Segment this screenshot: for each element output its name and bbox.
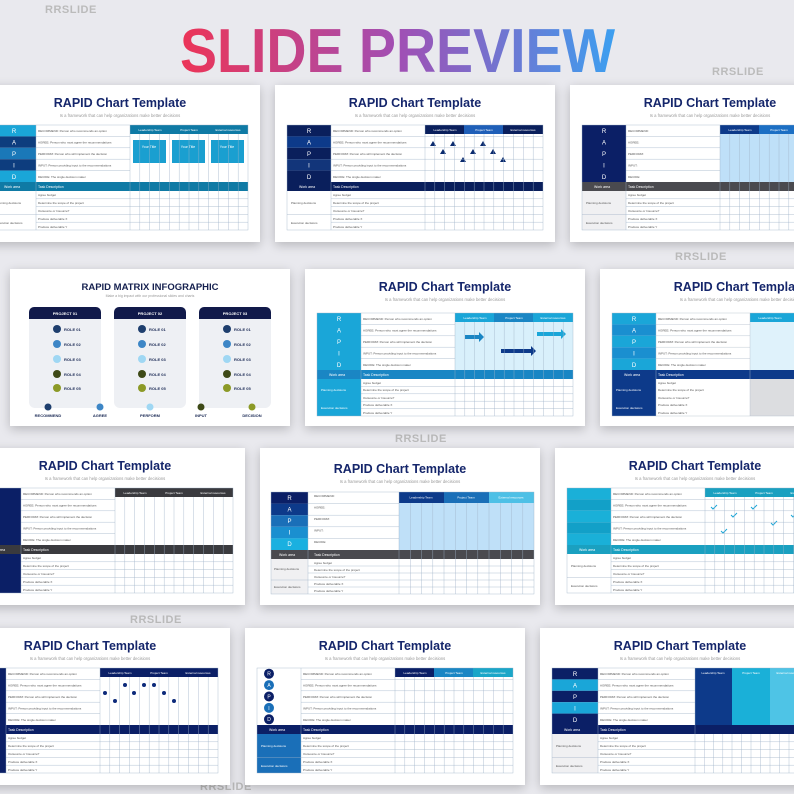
- slide: row4 col2: Outsource or Insource?: [303, 752, 335, 756]
- slide: row1 col3: [570, 85, 794, 242]
- slide: row1 col3: Agree budget: [628, 193, 646, 197]
- slide: row4 col2: P: [267, 694, 271, 700]
- slide: row3 col2: A: [287, 508, 292, 514]
- slide: row3 col1: RECOMMEND: Person who recommends an option: [23, 492, 92, 496]
- slide: row3 col3: [555, 448, 794, 605]
- slide: row2 col2: Determine the scope of the project: [363, 388, 409, 392]
- slide: rapid matrix infographic: ROLE 05: [64, 386, 81, 391]
- slide: row3 col3: Planning decisions: [571, 564, 597, 568]
- slide: row1 col2: DECIDE: The single decision maker: [333, 175, 381, 179]
- slide: row3 col2: Outsource or Insource?: [314, 575, 346, 579]
- slide: row4 col2: R: [267, 672, 271, 678]
- slide: row3 col3: Task Description: [613, 548, 639, 552]
- slide: row3 col3: Is a framework that can help organizations make better decisions: [635, 476, 755, 481]
- slide: row2 col3: Produce deliverable X: [658, 403, 687, 407]
- slide: row1 col2: RAPID Chart Template: [349, 96, 481, 110]
- slide: row4 col1: Outsource or Insource?: [8, 752, 40, 756]
- slide: row2 col2: D: [337, 363, 342, 369]
- slide: row4 col3: Work area: [564, 728, 580, 732]
- slide: row2 col3: Outsource or Insource?: [658, 396, 690, 400]
- watermark: RRSLIDE: [200, 781, 252, 793]
- slide: row4 col3: Task Description: [600, 728, 626, 732]
- slide: rapid matrix infographic: INPUT: [195, 413, 208, 418]
- slide: row4 col2: Determine the scope of the project: [303, 744, 349, 748]
- slide: row1 col1: PERFORM: Person who will implement the decision: [38, 152, 107, 156]
- slide: row4 col2: External resources: [480, 671, 506, 675]
- slide: row2 col2: [305, 269, 585, 426]
- slide: row4 col3: A: [573, 684, 577, 690]
- slide: row3 col2: RECOMMEND:: [314, 494, 335, 498]
- slide: row4 col3: Outsource or Insource?: [600, 752, 632, 756]
- slide: row4 col2: Produce deliverable X: [303, 760, 332, 764]
- slide: rapid matrix infographic: PROJECT 01: [53, 311, 78, 316]
- slide: row1 col1: A: [12, 140, 16, 146]
- slide: row2 col2: INPUT: Person providing input to the recommendations: [363, 352, 437, 356]
- slide: row2 col2: RAPID Chart Template: [379, 280, 511, 294]
- slide: row3 col1: AGREE: Person who must agree the recommendations: [23, 504, 97, 508]
- slide: row4 col2: DECIDE: The single decision maker: [303, 718, 351, 722]
- slide: row3 col1: Determine the scope of the project: [23, 564, 69, 568]
- slide: row1 col2: Project Team: [475, 128, 493, 132]
- slide: rapid matrix infographic: Make a big impact with our professional slides and charts: [106, 294, 195, 298]
- slide: row2 col2: Task Description: [363, 373, 389, 377]
- slide: row1 col2: External resources: [510, 128, 536, 132]
- slide: row4 col3: Leadership Team: [702, 671, 725, 675]
- slide: row2 col2: Produce deliverable X: [363, 403, 392, 407]
- slide: row1 col1: Your Title: [181, 145, 195, 149]
- slide: row3 col3: Produce deliverable Y: [613, 588, 642, 592]
- slide: row1 col1: External resources: [215, 128, 241, 132]
- watermark: RRSLIDE: [712, 66, 764, 78]
- slide: row2 col3: Task Description: [658, 373, 684, 377]
- slide: rapid matrix infographic: ROLE 01: [64, 327, 81, 332]
- slide: row4 col3: D: [573, 718, 578, 724]
- slide: row1 col1: Your Title: [142, 145, 156, 149]
- slide: row3 col2: P: [287, 519, 292, 525]
- slide: row1 col3: Determine the scope of the project: [628, 201, 674, 205]
- watermark: RRSLIDE: [675, 251, 727, 263]
- slide: row1 col3: R: [602, 129, 607, 135]
- slide: row1 col1: Determine the scope of the project: [38, 201, 84, 205]
- slide: row2 col2: Execution decisions: [321, 406, 348, 410]
- slide: row3 col3: AGREE: Person who must agree the recommendations: [613, 504, 687, 508]
- slide: row3 col1: Agree budget: [23, 556, 41, 560]
- slide: row2 col2: P: [337, 340, 341, 346]
- slide: row2 col2: Leadership Team: [464, 316, 487, 320]
- slide: row2 col2: Work area: [329, 373, 345, 377]
- slide: row3 col2: Planning decisions: [274, 567, 300, 571]
- slide: rapid matrix infographic: PERFORM: [140, 413, 161, 418]
- slide: row3 col3: Determine the scope of the project: [613, 564, 659, 568]
- slide: row1 col3: Is a framework that can help organizations make better decisions: [650, 113, 770, 118]
- slide: row3 col3: INPUT: Person providing input to the recommendations: [613, 526, 687, 530]
- slide: row3 col3: Project Team: [755, 491, 773, 495]
- slide: row1 col1: Outsource or Insource?: [38, 209, 70, 213]
- slide: row3 col3: Produce deliverable X: [613, 580, 642, 584]
- slide: row1 col3: RAPID Chart Template: [644, 96, 776, 110]
- slide: row1 col2: Outsource or Insource?: [333, 209, 365, 213]
- slide: row1 col3: Planning decisions: [586, 201, 612, 205]
- slide: row4 col3: Project Team: [742, 671, 760, 675]
- slide: row2 col2: Agree budget: [363, 381, 381, 385]
- slide: rapid matrix infographic: DECISION: [242, 413, 262, 418]
- slide: row2 col2: DECIDE: The single decision maker: [363, 363, 411, 367]
- slide: row1 col2: Determine the scope of the project: [333, 201, 379, 205]
- slide: row3 col1: Produce deliverable X: [23, 580, 52, 584]
- slide: row4 col1: Agree budget: [8, 736, 26, 740]
- slide: row3 col2: RAPID Chart Template: [334, 462, 466, 476]
- slide: row4 col1: AGREE: Person who must agree the recommendations: [8, 684, 82, 688]
- slide: row4 col1: Produce deliverable X: [8, 760, 37, 764]
- slide: row2 col2: Planning decisions: [321, 388, 347, 392]
- slide: row4 col3: Planning decisions: [556, 744, 582, 748]
- slide: row1 col1: RAPID Chart Template: [54, 96, 186, 110]
- slide: row4 col3: AGREE: Person who must agree the recommendations: [600, 684, 674, 688]
- slide: row1 col1: P: [12, 152, 16, 158]
- slide: rapid matrix infographic: ROLE 03: [234, 357, 251, 362]
- slide: row4 col2: Execution decisions: [261, 764, 288, 768]
- slide: row3 col3: RECOMMEND: Person who recommends an option: [613, 492, 682, 496]
- slide: row3 col2: Determine the scope of the project: [314, 568, 360, 572]
- slide: row1 col3: D: [602, 175, 607, 181]
- slide: row4 col2: Is a framework that can help organizations make better decisions: [325, 656, 445, 661]
- slide: row3 col3: PERFORM: Person who will implement the decision: [613, 515, 682, 519]
- slide: row2 col3: Leadership Team: [759, 316, 782, 320]
- slide: row4 col3: Is a framework that can help organizations make better decisions: [620, 656, 740, 661]
- watermark: RRSLIDE: [45, 4, 97, 16]
- slide: row4 col3: PERFORM: Person who will implement the decision: [600, 695, 669, 699]
- slide: row3 col2: I: [289, 530, 291, 536]
- slide: row4 col2: PERFORM: Person who will implement the decision: [303, 695, 372, 699]
- slide: row4 col3: RECOMMEND: Person who recommends an option: [600, 672, 669, 676]
- slide: row1 col1: DECIDE: The single decision maker: [38, 175, 86, 179]
- slide: row3 col2: Execution decisions: [274, 585, 301, 589]
- slide: row4 col3: DECIDE: The single decision maker: [600, 718, 648, 722]
- slide: row2 col3: I: [633, 352, 635, 358]
- slide: row3 col3: Outsource or Insource?: [613, 572, 645, 576]
- slide: rapid matrix infographic: ROLE 02: [64, 342, 81, 347]
- slide: row2 col3: Determine the scope of the project: [658, 388, 704, 392]
- slide: row1 col1: Agree budget: [38, 193, 56, 197]
- slide: row1 col3: Work area: [594, 185, 610, 189]
- slide: row1 col3: Execution decisions: [586, 221, 613, 225]
- slide: row4 col2: [245, 628, 525, 785]
- slide: row3 col2: Task Description: [314, 553, 340, 557]
- slide: rapid matrix infographic: AGREE: [93, 413, 107, 418]
- slide: row4 col2: Agree budget: [303, 736, 321, 740]
- slide: row1 col1: Produce deliverable Y: [38, 225, 67, 229]
- slide: row2 col2: R: [337, 317, 342, 323]
- slide: row4 col2: Project Team: [445, 671, 463, 675]
- slide: row3 col1: PERFORM: Person who will implement the decision: [23, 515, 92, 519]
- slide: row1 col2: Produce deliverable X: [333, 217, 362, 221]
- slide: row2 col3: RECOMMEND: Person who recommends an option: [658, 317, 727, 321]
- slide: row1 col1: R: [12, 129, 17, 135]
- slide: row3 col1: Project Team: [165, 491, 183, 495]
- slide: row3 col3: Work area: [579, 548, 595, 552]
- slide: row4 col2: RECOMMEND: Person who recommends an option: [303, 672, 372, 676]
- slide: row1 col3: Outsource or Insource?: [628, 209, 660, 213]
- slide: row4 col3: Execution decisions: [556, 764, 583, 768]
- slide: rapid matrix infographic: ROLE 01: [234, 327, 251, 332]
- slide: row2 col3: D: [632, 363, 637, 369]
- slide: row2 col3: Agree budget: [658, 381, 676, 385]
- slide: row3 col2: DECIDE:: [314, 540, 326, 544]
- slide: rapid matrix infographic: ROLE 01: [149, 327, 166, 332]
- slide: row1 col3: Produce deliverable X: [628, 217, 657, 221]
- slide: row3 col1: INPUT: Person providing input to the recommendations: [23, 526, 97, 530]
- slide: row4 col2: Task Description: [303, 728, 329, 732]
- slide: row1 col2: Is a framework that can help organizations make better decisions: [355, 113, 475, 118]
- slide: row4 col3: Agree budget: [600, 736, 618, 740]
- slide: row3 col2: Work area: [279, 553, 295, 557]
- slide: row3 col3: Agree budget: [613, 556, 631, 560]
- slide: row2 col3: Work area: [624, 373, 640, 377]
- slide: row3 col3: DECIDE: The single decision maker: [613, 538, 661, 542]
- watermark: RRSLIDE: [395, 433, 447, 445]
- slide: row1 col2: Agree budget: [333, 193, 351, 197]
- slide: row1 col2: Produce deliverable Y: [333, 225, 362, 229]
- slide: row1 col1: RECOMMEND: Person who recommends an option: [38, 129, 107, 133]
- slide: row4 col3: P: [573, 695, 577, 701]
- slide: row4 col2: A: [267, 683, 271, 689]
- slide: row3 col1: Outsource or Insource?: [23, 572, 55, 576]
- slide: row3 col2: Project Team: [457, 496, 475, 500]
- slide: row1 col1: Your Title: [220, 145, 234, 149]
- slide: row1 col3: Task Description: [628, 185, 654, 189]
- slide: rapid matrix infographic: ROLE 04: [64, 372, 81, 377]
- slide: row4 col1: Produce deliverable Y: [8, 768, 37, 772]
- slide: row2 col2: I: [338, 352, 340, 358]
- slide: rapid matrix infographic: PROJECT 03: [223, 311, 248, 316]
- slide: rapid matrix infographic: [10, 269, 290, 426]
- slide: row1 col2: A: [307, 140, 311, 146]
- slide: row4 col1: PERFORM: Person who will implement the decision: [8, 695, 77, 699]
- slide: row4 col3: I: [574, 706, 576, 712]
- slide: row4 col3: RAPID Chart Template: [614, 639, 746, 653]
- slide: row3 col1: Leadership Team: [124, 491, 147, 495]
- slide: row1 col1: Leadership Team: [139, 128, 162, 132]
- slide: row4 col3: R: [573, 672, 578, 678]
- slide: row3 col1: Is a framework that can help organizations make better decisions: [45, 476, 165, 481]
- slide: row3 col2: INPUT:: [314, 528, 324, 532]
- slide: row2 col3: [600, 269, 794, 426]
- slide: row3 col1: Produce deliverable Y: [23, 588, 52, 592]
- slide: row2 col3: A: [632, 328, 636, 334]
- slide: row4 col1: Leadership Team: [109, 671, 132, 675]
- slide: row1 col1: I: [13, 164, 15, 170]
- slide: row2 col2: Project Team: [505, 316, 523, 320]
- slide: row2 col3: P: [632, 340, 636, 346]
- slide: row1 col2: Work area: [299, 185, 315, 189]
- slide: rapid matrix infographic: ROLE 02: [149, 342, 166, 347]
- slide: row4 col1: External resources: [185, 671, 211, 675]
- slide: row4 col2: INPUT: Person providing input to the recommendations: [303, 706, 377, 710]
- slide: row4 col2: Planning decisions: [261, 744, 287, 748]
- slide: row3 col2: AGREE:: [314, 506, 326, 510]
- slide: row1 col3: DECIDE:: [628, 175, 640, 179]
- slide: row3 col2: D: [287, 542, 292, 548]
- slide: row1 col2: INPUT: Person providing input to the recommendations: [333, 164, 407, 168]
- slide: row3 col2: Agree budget: [314, 561, 332, 565]
- slide: row3 col3: Execution decisions: [571, 584, 598, 588]
- slide: row2 col2: PERFORM: Person who will implement the decision: [363, 340, 432, 344]
- slide: row4 col2: Produce deliverable Y: [303, 768, 332, 772]
- slide: row4 col1: DECIDE: The single decision maker: [8, 718, 56, 722]
- slide: row4 col3: [540, 628, 794, 785]
- slide: row3 col2: Is a framework that can help organizations make better decisions: [340, 479, 460, 484]
- slide: row2 col2: Outsource or Insource?: [363, 396, 395, 400]
- slide: row1 col3: INPUT:: [628, 164, 638, 168]
- slide: row1 col1: Task Description: [38, 185, 64, 189]
- slide: row1 col1: Produce deliverable X: [38, 217, 67, 221]
- slide: rapid matrix infographic: PROJECT 02: [138, 311, 163, 316]
- slide: row1 col3: Leadership Team: [729, 128, 752, 132]
- slide: row2 col3: Planning decisions: [616, 388, 642, 392]
- slide: row2 col3: R: [632, 317, 637, 323]
- slide: row3 col1: [0, 448, 245, 605]
- slide: rapid matrix infographic: ROLE 04: [149, 372, 166, 377]
- slide: row2 col3: PERFORM: Person who will implement the decision: [658, 340, 727, 344]
- slide: row1 col2: Execution decisions: [291, 221, 318, 225]
- slide: row2 col3: INPUT: Person providing input to the recommendations: [658, 352, 732, 356]
- slide: row2 col3: Produce deliverable Y: [658, 411, 687, 415]
- slide: row3 col3: Leadership Team: [714, 491, 737, 495]
- slide: rapid matrix infographic: ROLE 03: [149, 357, 166, 362]
- watermark: RRSLIDE: [130, 614, 182, 626]
- slide: row1 col3: A: [602, 140, 606, 146]
- slide: row1 col2: [275, 85, 555, 242]
- slide: row4 col1: [0, 628, 230, 785]
- slide: row1 col3: PERFORM:: [628, 152, 644, 156]
- slide: row4 col3: INPUT: Person providing input to the recommendations: [600, 706, 674, 710]
- slide: row1 col1: INPUT: Person providing input to the recommendations: [38, 164, 112, 168]
- slide: row4 col2: Work area: [269, 728, 285, 732]
- slide: row4 col3: Produce deliverable X: [600, 760, 629, 764]
- slide: row3 col2: Produce deliverable Y: [314, 589, 343, 593]
- slide: row4 col1: INPUT: Person providing input to the recommendations: [8, 706, 82, 710]
- slide: row4 col2: RAPID Chart Template: [319, 639, 451, 653]
- slide: row2 col2: Is a framework that can help organizations make better decisions: [385, 297, 505, 302]
- slide: row1 col2: I: [308, 164, 310, 170]
- slide: row1 col3: AGREE:: [628, 140, 640, 144]
- slide: row1 col1: Work area: [4, 185, 20, 189]
- slide: row3 col2: Produce deliverable X: [314, 582, 343, 586]
- slide: row1 col2: R: [307, 129, 312, 135]
- slide: row3 col2: R: [287, 496, 292, 502]
- slide: row4 col3: Produce deliverable Y: [600, 768, 629, 772]
- slide: row4 col3: Determine the scope of the project: [600, 744, 646, 748]
- slide: row4 col2: D: [267, 717, 271, 723]
- slide: rapid matrix infographic: ROLE 05: [234, 386, 251, 391]
- slide: row2 col2: AGREE: Person who must agree the recommendations: [363, 328, 437, 332]
- slide: row1 col2: Task Description: [333, 185, 359, 189]
- slide: row2 col3: DECIDE: The single decision maker: [658, 363, 706, 367]
- slide: row3 col2: [260, 448, 540, 605]
- slide: row4 col1: Project Team: [150, 671, 168, 675]
- slide: row1 col1: Project Team: [180, 128, 198, 132]
- slide: row3 col1: RAPID Chart Template: [39, 459, 171, 473]
- slide: row3 col2: PERFORM:: [314, 517, 330, 521]
- slide: row1 col2: PERFORM: Person who will implement the decision: [333, 152, 402, 156]
- slide: row4 col2: I: [268, 706, 270, 712]
- slide: row2 col3: Execution decisions: [616, 406, 643, 410]
- slide: row2 col2: External resources: [540, 316, 566, 320]
- slide: rapid matrix infographic: ROLE 03: [64, 357, 81, 362]
- slide: row1 col3: I: [603, 164, 605, 170]
- slide: row4 col1: Is a framework that can help organizations make better decisions: [30, 656, 150, 661]
- slide: row1 col2: Leadership Team: [434, 128, 457, 132]
- slide: row1 col3: Produce deliverable Y: [628, 225, 657, 229]
- slide: row4 col1: RAPID Chart Template: [24, 639, 156, 653]
- slide: row1 col3: Project Team: [770, 128, 788, 132]
- slide: row1 col2: RECOMMEND: Person who recommends an option: [333, 129, 402, 133]
- slide: row4 col1: Determine the scope of the project: [8, 744, 54, 748]
- slide: row3 col1: DECIDE: The single decision maker: [23, 538, 71, 542]
- slide: row1 col1: D: [12, 175, 17, 181]
- slide: row3 col1: External resources: [200, 491, 226, 495]
- slide: rapid matrix infographic: RECOMMEND: [35, 413, 61, 418]
- slide: row4 col2: AGREE: Person who must agree the recommendations: [303, 684, 377, 688]
- slide: row1 col3: RECOMMEND:: [628, 129, 649, 133]
- slide: row2 col3: AGREE: Person who must agree the recommendations: [658, 328, 732, 332]
- slide: row1 col1: [0, 85, 260, 242]
- slide: row4 col1: Task Description: [8, 728, 34, 732]
- slide: rapid matrix infographic: ROLE 02: [234, 342, 251, 347]
- slide: row4 col1: RECOMMEND: Person who recommends an option: [8, 672, 77, 676]
- slide: row1 col2: Planning decisions: [291, 201, 317, 205]
- slide: rapid matrix infographic: RAPID MATRIX INFOGRAPHIC: [81, 282, 219, 293]
- slide: row1 col1: Is a framework that can help organizations make better decisions: [60, 113, 180, 118]
- slide: rapid matrix infographic: ROLE 04: [234, 372, 251, 377]
- slide: rapid matrix infographic: ROLE 05: [149, 386, 166, 391]
- slide: row3 col3: RAPID Chart Template: [629, 459, 761, 473]
- slide: row2 col2: RECOMMEND: Person who recommends an option: [363, 317, 432, 321]
- slide: row3 col2: External resources: [498, 496, 524, 500]
- slide: row1 col1: AGREE: Person who must agree the recommendations: [38, 140, 112, 144]
- slide: row1 col2: D: [307, 175, 312, 181]
- slide: row3 col2: Leadership Team: [410, 496, 433, 500]
- slide: row1 col2: P: [307, 152, 311, 158]
- slide: row2 col2: A: [337, 328, 341, 334]
- slide: row3 col1: Task Description: [23, 548, 49, 552]
- slide: row2 col2: Produce deliverable Y: [363, 411, 392, 415]
- slide: row1 col3: P: [602, 152, 606, 158]
- slide: row4 col2: Leadership Team: [404, 671, 427, 675]
- slide: row1 col2: AGREE: Person who must agree the recommendations: [333, 140, 407, 144]
